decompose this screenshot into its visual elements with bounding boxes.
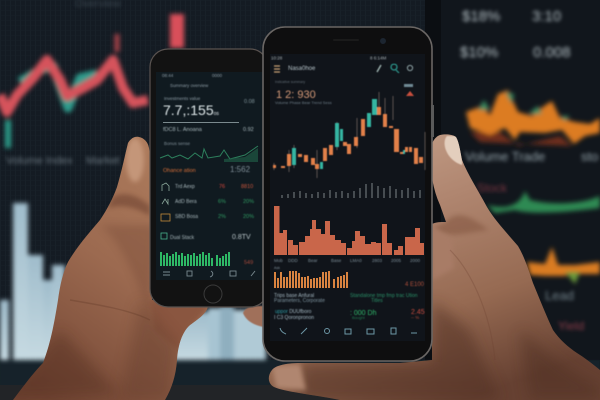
right monitor blurred figures: $10% (460, 44, 498, 61)
phone 2 (front, right) (263, 27, 434, 361)
phone 2 status bar: 10:28 (271, 56, 283, 60)
right monitor orange chart (466, 90, 600, 146)
phone 2 axis labels: Mob (274, 258, 283, 263)
phone 1 body labels: 20% (243, 214, 254, 220)
right monitor blurred figures: Lead (545, 288, 574, 303)
left monitor blurred labels: Volume Index (6, 155, 73, 167)
phone 1 screen (156, 72, 264, 280)
phone 2 price header: 1 2: 930 (276, 89, 316, 101)
phone 1 home button (204, 285, 222, 303)
phone 1 body labels: 0.8TV (232, 234, 251, 241)
phone 2 lower info rows: Bought (352, 315, 366, 320)
phone 2 lower info rows: 4 E100 (405, 282, 425, 288)
phone 1 body labels: 0.92 (243, 127, 254, 133)
phone 1 green sparkline (160, 146, 258, 159)
phone 2 price header: Indicative summary (275, 80, 305, 84)
phone 1 body labels (163, 99, 255, 266)
phone 2 volume ticks (282, 183, 420, 198)
right monitor blurred figures: 3:10 (532, 8, 561, 25)
phone 1 body labels: 20% (243, 199, 254, 205)
left monitor bar chart (0, 203, 266, 360)
phone 1 status and nav text: Investments value (164, 96, 201, 101)
phone 1 status and nav text: Summary overview (170, 83, 209, 88)
right monitor blurred figures (460, 8, 598, 333)
phone 2 price header (275, 80, 414, 105)
phone 2 lower info rows: : 000 Dh (350, 310, 377, 317)
right monitor green chart (487, 191, 600, 213)
phone 1 list icons (161, 183, 170, 239)
phone 1 body labels: Dual Stack (170, 235, 195, 241)
phone 2 axis labels: 2005 (391, 258, 402, 263)
phone 1 body (150, 49, 268, 307)
phone 2 axis labels: Bear (308, 258, 318, 263)
phone 1 body labels: Bonus sense (164, 141, 191, 146)
phone 2 lower info rows: -- % (411, 315, 419, 320)
phone 1 status and nav text (162, 73, 223, 101)
phone 2 bottom nav icons (280, 328, 417, 334)
phone 2 lower info rows (274, 282, 425, 321)
phone 2 axis labels: LMA0 (350, 258, 362, 263)
phone 2 small orange bars (274, 271, 348, 288)
right monitor blurred figures: Stock (477, 181, 508, 195)
right monitor blurred figures: $18% (462, 8, 500, 25)
phone 1 green bar chart (160, 252, 230, 266)
right monitor blurred figures: sto (581, 149, 598, 164)
phone 1 body labels: Trd Aexp (175, 184, 195, 190)
phone 2 axis labels: 2000 (410, 258, 421, 263)
phone 1 body labels: 549 (244, 260, 253, 266)
phone 1 body labels: 8810 (241, 184, 253, 190)
phone 2 axis labels: Base (331, 258, 342, 263)
phone 1 headline balance: 7.7,:155os (163, 102, 219, 118)
phone 2 camera (333, 38, 386, 44)
phone 2 axis labels: DDD (288, 258, 298, 263)
phone 2 orange bar chart (274, 206, 424, 255)
phone 1 body labels: fDC8 L. Anoana (163, 127, 203, 133)
phone 1 body labels: Ohance ation (163, 168, 196, 174)
thumb nail (445, 136, 462, 165)
phone 1 divider (163, 122, 239, 123)
phone 1 body labels: 2% (218, 214, 226, 220)
phone 1 body labels: 0.08 (244, 99, 255, 105)
phone 1 body labels: AdD Bera (175, 199, 197, 205)
phone 2 body (263, 27, 432, 361)
left monitor blurred labels: Market (86, 155, 120, 167)
right monitor blurred figures: 0.008 (533, 44, 571, 61)
phone 2 app bar (274, 64, 413, 73)
phone 1 (back, left) (150, 49, 268, 307)
finger between phones (243, 306, 272, 328)
phone 2 app bar: Nasa0hoe (288, 66, 316, 72)
phone 2 screen (270, 54, 425, 341)
phone 2 axis labels (274, 258, 421, 270)
phone 2 side button (431, 105, 434, 137)
phone 2 lower info rows: Titles (371, 298, 383, 304)
right monitor lower orange chart (527, 247, 600, 284)
phone 2 candlestick chart (273, 92, 425, 178)
right monitor blurred figures: Volume Trade (465, 149, 545, 164)
phone 2 price header: Volume Phase Bear Trend Sess (275, 100, 332, 105)
left monitor line chart (0, 14, 177, 148)
right monitor blurred figures: Yield (558, 319, 584, 333)
phone 1 body labels: 6% (218, 199, 226, 205)
phone 2 lower info rows: uppor DUUfboro (275, 309, 312, 315)
phone 2 lower info rows: Parameters, Corporate (274, 298, 325, 304)
phone 1 body labels: SBD Bosa (175, 214, 198, 220)
left hand (13, 136, 208, 400)
phone 1 body labels: 1:562 (230, 165, 251, 174)
phone 2 lower info rows: I C3 Qoronpronon (274, 315, 314, 321)
phone 1 bottom nav (163, 271, 255, 277)
phone 2 status bar: 8 6:14M (370, 56, 387, 60)
phone 1 status and nav text: 08:44 (162, 73, 174, 78)
left monitor blurred labels (6, 0, 121, 167)
phone 2 axis labels: 2803 (372, 258, 383, 263)
phone 1 status and nav text: 0000 (212, 73, 223, 78)
thumb crease shading (432, 215, 488, 234)
phone 2 axis labels: Ask (274, 266, 280, 270)
phone 2 status bar (271, 56, 387, 60)
phone 2 lower info rows: Standalone tmp fmp trac Ution (350, 293, 418, 299)
thumb highlight and shading (126, 138, 144, 182)
right hand (260, 130, 600, 400)
phone 2 lower info rows: 2.45 (411, 309, 425, 316)
phone 1 body labels: 76 (219, 184, 225, 190)
phone 2 lower info rows: Trips base Anfural (274, 293, 314, 299)
